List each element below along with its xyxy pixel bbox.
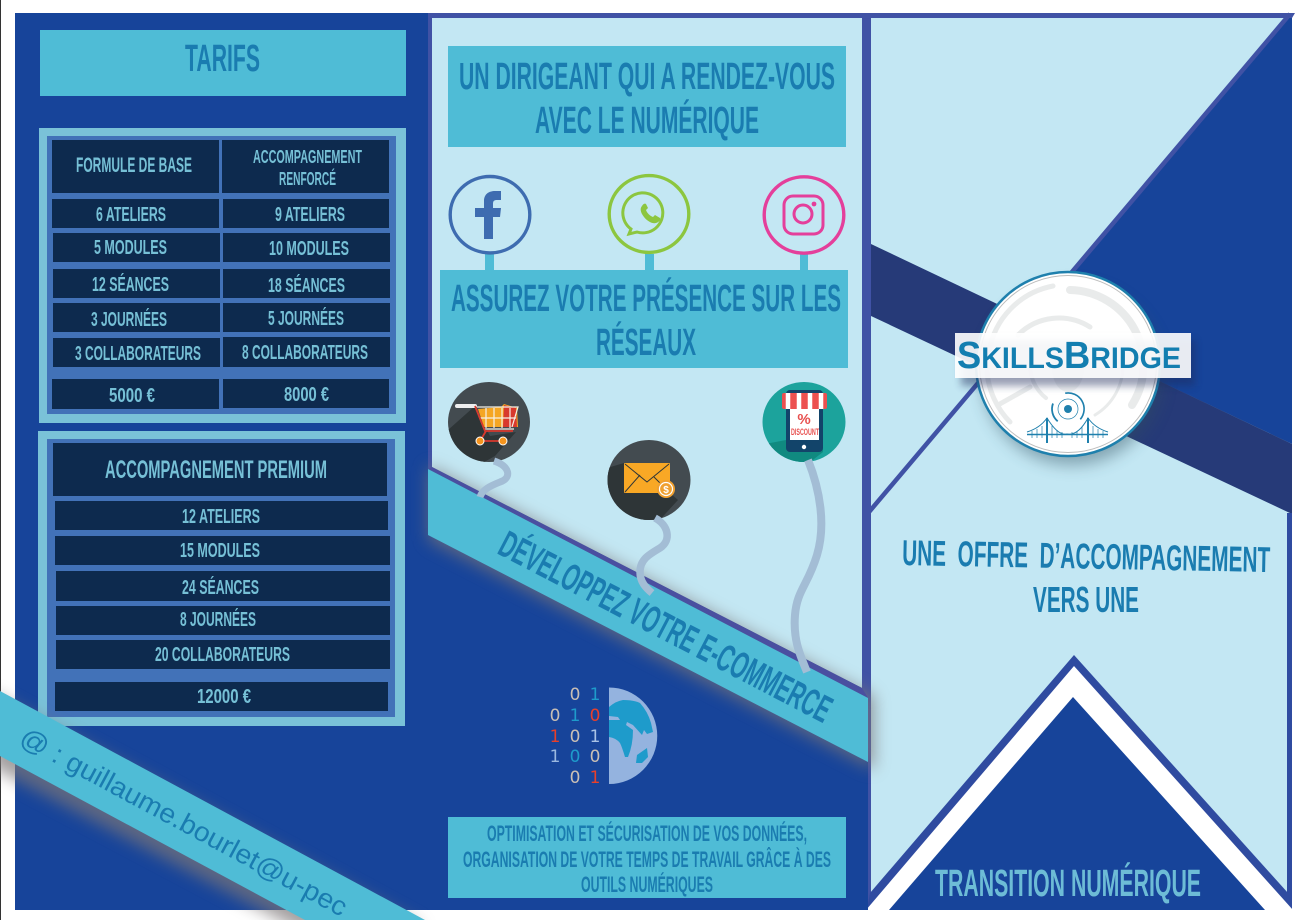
binary digits: 0 [590, 747, 600, 767]
heading: dirigeant [448, 46, 846, 147]
cell: accompagnement premium: ACCOMPAGNEMENT PREMIUM [105, 456, 327, 484]
chevron: transition numerique [866, 655, 1293, 910]
panel: middle [428, 13, 874, 910]
cell: 6 ateliers [52, 199, 219, 228]
logo label backing [961, 340, 1195, 386]
cell: 8 journees [56, 606, 390, 635]
cell: 15 modules: 15 MODULES [180, 540, 260, 562]
heading: reseaux [440, 270, 848, 368]
text box: optimisation: OPTIMISATION ET SÉCURISATION DE VOS DONNÉES, [487, 821, 807, 846]
ribbon: e-commerce: DÉVELOPPEZ VOTRE E-COMMERCE [492, 522, 839, 731]
heading: reseaux: RÉSEAUX [596, 320, 696, 364]
cell: 8 collaborateurs: 8 COLLABORATEURS [242, 342, 368, 364]
right frame [1287, 513, 1292, 910]
cell: 9 ateliers: 9 ATELIERS [275, 204, 345, 226]
cell: accompagnement renforce: RENFORCÉ [279, 168, 336, 189]
icon: facebook [450, 176, 530, 253]
cell: accompagnement premium [53, 443, 387, 496]
text box: optimisation: ORGANISATION DE VOTRE TEMPS DE TRAVAIL GRÂCE À DES [463, 847, 831, 872]
cell: 12 ateliers [55, 501, 388, 530]
heading: reseaux: ASSUREZ VOTRE PRÉSENCE SUR LES [451, 276, 841, 320]
cell: 5 modules [53, 233, 220, 262]
cell: formule de base [52, 140, 219, 193]
ribbon: e-commerce [428, 469, 868, 762]
text box: optimisation: OUTILS NUMÉRIQUES [581, 872, 713, 897]
table: two formulas [39, 128, 406, 423]
cell: 15 modules [55, 536, 390, 565]
dark blue corner [1030, 18, 1292, 444]
heading: dirigeant: AVEC LE NUMÉRIQUE [535, 98, 759, 142]
cell: 20 collaborateurs: 20 COLLABORATEURS [155, 644, 290, 666]
icon: bridge and target [1027, 393, 1108, 443]
icon: discount shop: % [797, 411, 811, 428]
purple diagonal edge [428, 467, 868, 698]
icon: instagram [764, 177, 844, 253]
logo wordmark: SKILLSBRIDGE [957, 335, 1181, 377]
connector: cart [480, 461, 508, 497]
cell: 3 journees [53, 303, 220, 332]
cell: 5 journees: 5 JOURNÉES [268, 307, 344, 330]
cell: formule de base: FORMULE DE BASE [76, 154, 192, 177]
binary digits: 1 [550, 727, 560, 747]
binary digits: 1 [550, 747, 560, 767]
binary digits: 1 [590, 727, 600, 747]
ribbon: email: @ : guillaume.bourlet@u-pec [15, 722, 353, 920]
cell: 12 ateliers: 12 ATELIERS [182, 506, 260, 528]
logo rings [987, 286, 1144, 422]
cell: 20 collaborateurs [56, 640, 390, 669]
icon: envelope [608, 440, 690, 520]
cell: 3 collaborateurs [53, 338, 220, 367]
cell: 9 ateliers [223, 199, 389, 228]
frame [428, 13, 868, 700]
cell: 24 seances: 24 SÉANCES [182, 576, 259, 599]
heading: vers une: VERS UNE [1033, 579, 1139, 620]
cell: 5000 euros [52, 379, 219, 409]
binary digits: 1 [590, 768, 600, 788]
binary digits: 1 [590, 685, 600, 705]
table: premium [38, 431, 405, 726]
cell: 24 seances [56, 571, 390, 601]
binary digits: 0 [570, 768, 580, 788]
ribbon shadow [428, 465, 874, 770]
cell: 5 modules: 5 MODULES [94, 237, 167, 259]
icon: half globe [609, 688, 657, 784]
connector: discount [795, 460, 821, 672]
cell: accompagnement renforce [222, 140, 389, 193]
navy band [871, 244, 1292, 514]
cell: 12000 euros: 12000 € [197, 686, 251, 708]
cell: 6 ateliers: 6 ATELIERS [96, 204, 166, 226]
cell: 5 journees [223, 303, 390, 332]
cell: 10 modules [223, 233, 390, 262]
icon: whatsapp [609, 176, 689, 252]
icon: envelope: $ [663, 485, 669, 496]
icon: cart [448, 382, 530, 462]
logo: SkillsBridge [955, 272, 1195, 465]
email ribbon shadow [0, 692, 425, 920]
cell: 5000 euros: 5000 € [109, 385, 155, 407]
binary digits: 0 [570, 747, 580, 767]
panel: tarifs [15, 13, 428, 910]
frame [867, 13, 1295, 910]
cell: 12 seances [53, 269, 220, 298]
light area [432, 18, 862, 688]
icon: discount shop [762, 382, 846, 462]
cell: 3 journees: 3 JOURNÉES [91, 308, 167, 331]
cell: 10 modules: 10 MODULES [269, 238, 349, 260]
cell: 3 collaborateurs: 3 COLLABORATEURS [75, 343, 201, 365]
cell: 8 journees: 8 JOURNÉES [180, 608, 256, 631]
binary digits: 0 [590, 706, 600, 726]
cell: 12000 euros [55, 682, 388, 711]
text box: optimisation [448, 817, 846, 898]
cell: 8000 euros: 8000 € [284, 384, 329, 406]
cell: 8000 euros [223, 379, 389, 408]
icon: discount shop: DISCOUNT [791, 427, 819, 437]
ribbon: email [0, 691, 425, 920]
heading: dirigeant: UN DIRIGEANT QUI A RENDEZ-VOUS [459, 56, 835, 98]
binary digits [550, 685, 600, 788]
cell: 8 collaborateurs [223, 337, 390, 367]
cell: 18 seances: 18 SÉANCES [268, 274, 345, 297]
panel: right cover [866, 13, 1295, 910]
binary digits: 0 [570, 727, 580, 747]
icon stems [485, 254, 808, 271]
binary digits: 0 [550, 706, 560, 726]
heading: tarifs: TARIFS [185, 38, 260, 80]
connector: envelope [640, 518, 667, 593]
cell: accompagnement renforce: ACCOMPAGNEMENT [253, 147, 362, 167]
cell: 18 seances [223, 269, 390, 298]
binary digits: 1 [570, 706, 580, 726]
diagonal line [869, 14, 1290, 512]
binary digits: 0 [570, 685, 580, 705]
cell: 12 seances: 12 SÉANCES [92, 273, 169, 296]
heading: tarifs [40, 30, 406, 96]
